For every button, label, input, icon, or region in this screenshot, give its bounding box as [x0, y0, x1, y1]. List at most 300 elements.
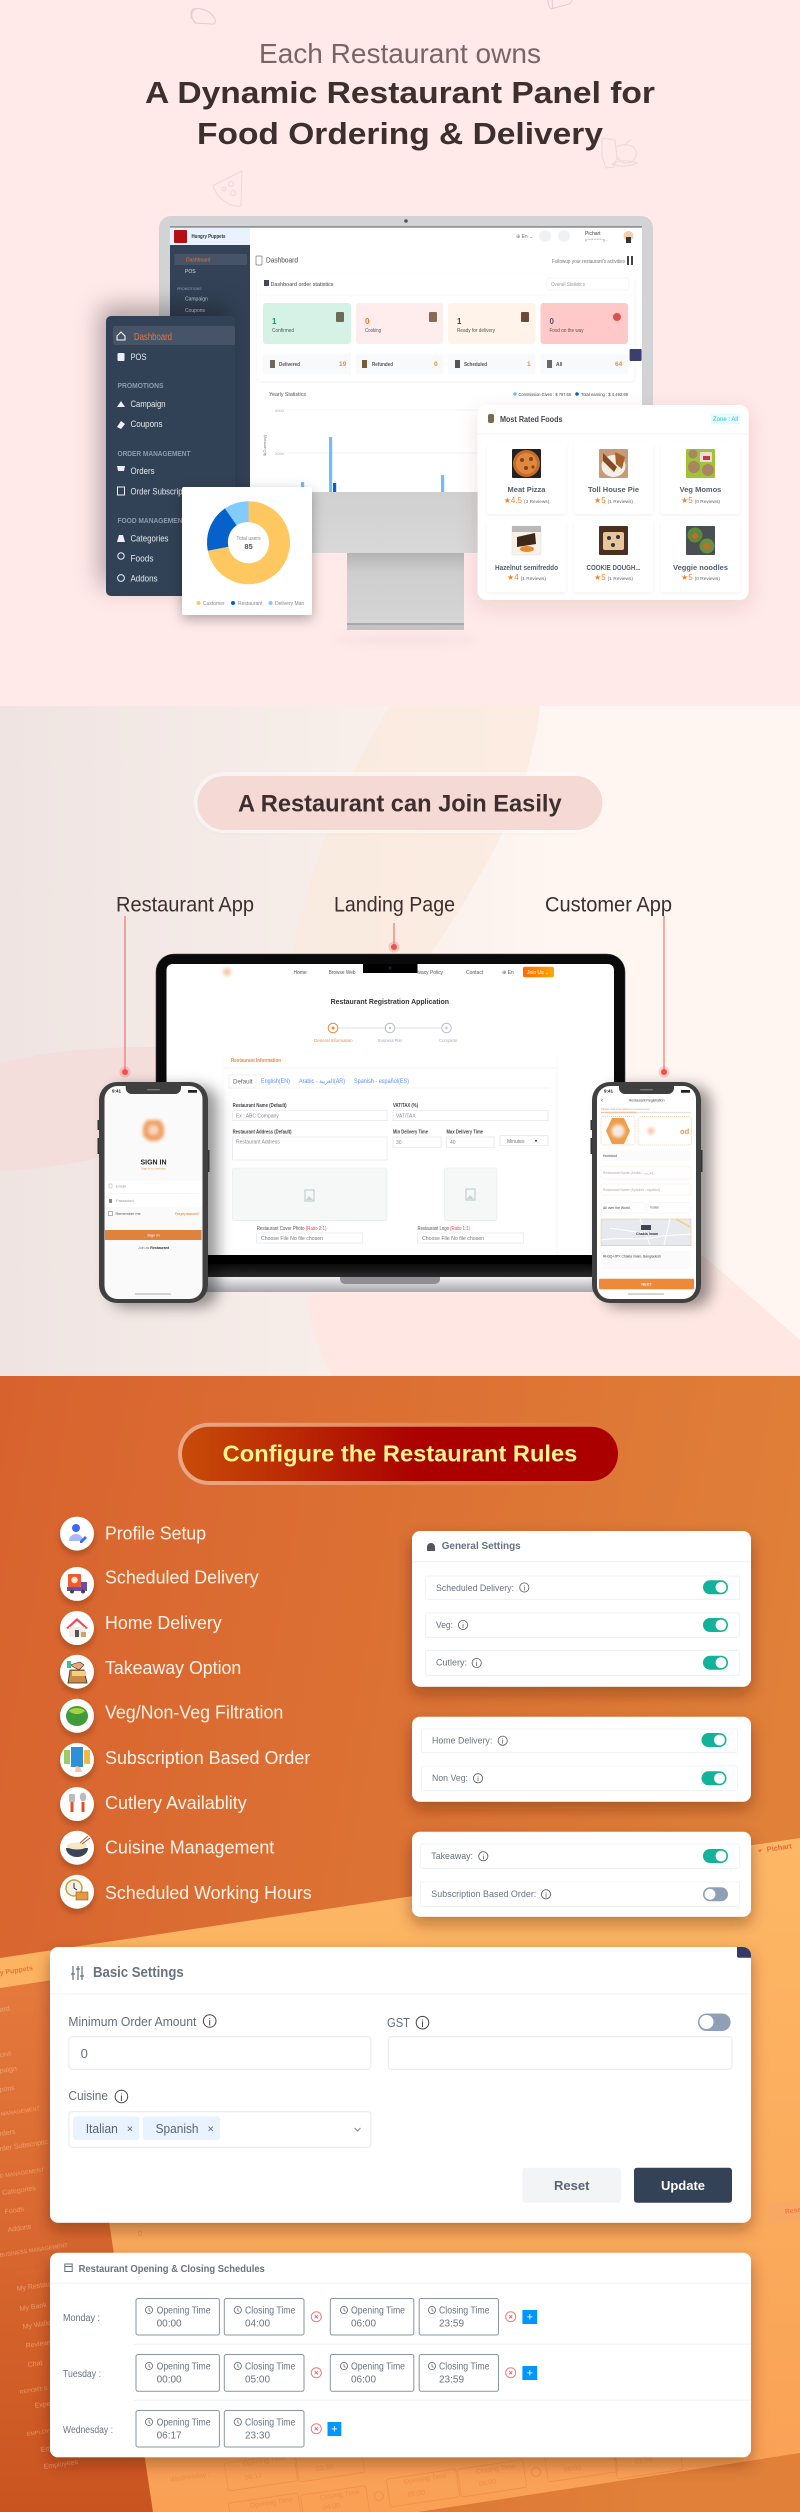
heading pill: join easily: A Restaurant can Join Easily [238, 790, 562, 818]
address box [601, 1251, 691, 1269]
field: cuisine: i [120, 2093, 123, 2104]
stepper: General Information [314, 1038, 353, 1043]
screen sidebar: PROMOTIONS [177, 287, 202, 291]
stat card: cooking: Cooking [365, 328, 381, 334]
screen top bar [516, 230, 634, 243]
general settings heading [412, 1540, 751, 1562]
field: gst [387, 2014, 732, 2069]
language tabs: Spanish - español(ES) [354, 1078, 409, 1085]
file upload inputs: Restaurant Cover Photo (Ratio 2:1) [257, 1226, 327, 1232]
home indicator [135, 1294, 171, 1295]
row: veg: Veg: [436, 1620, 453, 1631]
backdrop sidebar text: Addons [7, 2223, 32, 2234]
remember me row [108, 1212, 200, 1216]
order statistics panel: Overall Statistics [551, 282, 585, 288]
home indicator [628, 1294, 664, 1295]
feature: cutlery availability: Cutlery Availablity [105, 1793, 247, 1813]
backdrop zero field: 0 [138, 2231, 142, 2238]
backdrop sidebar text: MANAGEMENT [0, 2106, 41, 2118]
row: scheduled delivery: i [524, 1586, 526, 1592]
feature: scheduled working hours: Scheduled Working Hours [105, 1883, 312, 1903]
sidebar order group: Order Subscrip [130, 486, 182, 498]
screen top bar: ⊕ En ⌄ [516, 234, 533, 240]
small stat row: Refunded [372, 362, 393, 368]
food: Veggie noodles: ★5 (0 Reviews) [681, 573, 720, 582]
row: veg: i [462, 1623, 464, 1630]
registration header: ‹ [601, 1098, 603, 1104]
monday slots: 04:00 [245, 2318, 270, 2330]
stat card: food on the way: Food on the way [550, 328, 584, 334]
schedule heading [50, 2263, 751, 2283]
backdrop schedule text [169, 2455, 653, 2512]
backdrop sidebar text: Categories [2, 2185, 37, 2197]
stepper [314, 1023, 458, 1043]
monitor stand [347, 553, 464, 630]
monday slots: 06:00 [351, 2318, 376, 2330]
donut chart: 85 [244, 542, 253, 551]
feature: veg filtration [60, 1699, 283, 1733]
cover upload: od [680, 1127, 690, 1136]
laptop base [150, 1255, 640, 1292]
monday slots: Closing Time [439, 2306, 490, 2316]
row: veg [426, 1613, 740, 1637]
landing nav: Home [294, 970, 307, 976]
food: Meat Pizza: Meat Pizza [508, 485, 546, 494]
schedule heading: Restaurant Opening & Closing Schedules [79, 2263, 265, 2275]
row: takeaway: i [483, 1854, 485, 1861]
field: minimum order amount: 0 [81, 2046, 88, 2061]
backdrop sidebar text: Foods [4, 2206, 25, 2216]
row: takeaway [420, 1844, 740, 1868]
chip: Italian [73, 2116, 139, 2140]
row: cutlery [426, 1650, 740, 1675]
registration form panel [224, 1053, 556, 1255]
doodle: pizza slice [213, 171, 242, 206]
backdrop schedule rows [224, 2442, 683, 2512]
logo upload [601, 1117, 635, 1145]
panel: general settings [412, 1531, 751, 1687]
row: non veg: Non Veg: [432, 1773, 468, 1784]
chip: Spanish [143, 2116, 220, 2140]
sidebar promotions group: Campaign [130, 399, 166, 410]
stat card: cooking: 0 [365, 317, 370, 326]
yearly statistics chart: Total earning : $ 4,492.99 [581, 392, 629, 397]
backdrop schedule text: 08:00 [563, 2464, 582, 2474]
backdrop sidebar text: y Puppets [0, 1965, 33, 1977]
food: Meat Pizza: ★4.5 (3 Reviews) [504, 496, 550, 505]
stat card: food on the way [540, 303, 628, 344]
donut legend: Delivery Man [275, 601, 304, 607]
sign in button [105, 1230, 202, 1250]
panel: opening and closing schedules [50, 2253, 751, 2457]
tuesday slots [136, 2354, 537, 2391]
sidebar food group: Foods [130, 554, 154, 564]
phone notch [112, 1086, 197, 1094]
monday slots: 00:00 [157, 2318, 182, 2330]
backdrop reset button [767, 2199, 800, 2224]
row: takeaway: Takeaway: [431, 1851, 473, 1862]
monday slots: Opening Time [351, 2306, 405, 2316]
sidebar POS item: POS [130, 352, 146, 363]
backdrop sidebar text [0, 1965, 79, 2471]
small stat row: Delivered [279, 362, 300, 368]
food: Hazelnut semifreddo: ★4 (1 Reviews) [507, 573, 546, 582]
yearly statistics chart: 4000 [275, 408, 285, 413]
feature: takeaway option: Takeaway Option [105, 1658, 241, 1678]
registration header [601, 1098, 691, 1113]
backdrop sidebar text: EMPLOY [26, 2429, 50, 2438]
food: Veg Momos: Veg Momos [680, 485, 721, 494]
stat card: ready for delivery: 1 [457, 317, 462, 326]
language tabs: Default [233, 1078, 253, 1086]
tuesday slots: Opening Time [351, 2362, 405, 2372]
backdrop schedule text: 23:30 [315, 2463, 334, 2473]
section: join background [0, 706, 800, 1376]
sidebar active item [113, 326, 235, 345]
feature: home delivery [60, 1611, 222, 1645]
landing nav [223, 967, 554, 977]
screen title: Followup your restaurant's activities [552, 259, 625, 265]
small stat row: 64 [615, 361, 623, 368]
stepper: Business Plan [378, 1038, 403, 1043]
feature: profile setup [60, 1517, 206, 1551]
tuesday slots: 00:00 [157, 2374, 182, 2386]
registration form panel: Restaurant Information [231, 1058, 281, 1064]
row: home delivery [422, 1729, 738, 1753]
basic settings heading: Basic Settings [93, 1965, 184, 1981]
backdrop sidebar text: rder Subscriptic [0, 2139, 49, 2153]
wednesday slots: Closing Time [245, 2418, 296, 2428]
backdrop sidebar text: Reviews [25, 2339, 53, 2350]
food: COOKIE DOUGH [574, 520, 653, 592]
sidebar POS item [118, 352, 146, 363]
label: Landing Page: Landing Page [334, 894, 455, 916]
tuesday slots: Closing Time [439, 2362, 490, 2372]
field: minimum order amount: Minimum Order Amount [68, 2014, 197, 2029]
donut legend: Restaurant [238, 601, 263, 607]
callout line: customer app [658, 916, 670, 1078]
field: cuisine [68, 2088, 371, 2147]
backdrop schedule text: 06:00 [478, 2478, 497, 2488]
wednesday slots: + [331, 2424, 338, 2436]
food: COOKIE DOUGH: COOKIE DOUGH... [586, 563, 640, 572]
file upload inputs: Choose File No file chosen [261, 1236, 323, 1242]
backdrop schedule text: Opening Time [249, 2497, 294, 2510]
sidebar order group: ORDER MANAGEMENT [118, 451, 191, 458]
general settings heading: General Settings [442, 1540, 521, 1552]
language tabs: English(EN) [261, 1078, 290, 1085]
small stat row: 1 [527, 361, 531, 368]
sidebar promotions group: Coupons [130, 419, 163, 430]
yearly statistics chart: 2000 [275, 451, 285, 456]
monitor stand shadow [335, 634, 475, 646]
day labels: Tuesday : [63, 2369, 101, 2380]
stat card: food on the way: 0 [550, 317, 554, 326]
monitor body [159, 216, 653, 553]
backdrop schedule text: 04:00 [322, 2502, 341, 2512]
yearly statistics chart: Commission Given : $ 797.55 [518, 392, 572, 397]
row: home delivery: i [502, 1739, 504, 1746]
laptop mockup [150, 954, 640, 1292]
chip: Spanish: Spanish [156, 2121, 198, 2136]
stat card: ready for delivery: Ready for delivery [457, 328, 495, 334]
panel: order toggles [412, 1832, 751, 1917]
chip: Italian: Italian [86, 2121, 118, 2136]
language tabs: Arabic - العربية(AR) [299, 1078, 345, 1085]
registration header: Please add information to proceed next [601, 1107, 650, 1111]
backdrop sidebar text: REPORT S [19, 2386, 48, 2396]
backdrop sidebar text: My Walle [22, 2320, 52, 2331]
small stat row [263, 354, 628, 374]
food: Veggie noodles [661, 520, 740, 592]
backdrop sidebar text: Expe [34, 2401, 51, 2410]
row: non veg: i [477, 1776, 479, 1783]
foods card heading: Most Rated Foods [500, 415, 563, 424]
laptop lid [156, 954, 625, 1262]
heading pill: configure rules [178, 1423, 618, 1485]
phone notch [604, 1086, 690, 1094]
small stat row: 19 [339, 361, 347, 368]
button: update [634, 2168, 732, 2203]
webcam notch [363, 964, 418, 973]
sidebar promotions group [117, 383, 166, 430]
foods card heading: Zone : All [713, 417, 738, 423]
food: COOKIE DOUGH: ★5 (1 Reviews) [594, 573, 633, 582]
monday slots: Closing Time [245, 2306, 296, 2316]
screen sidebar [170, 245, 250, 492]
backdrop sidebar text: Restaurant [16, 2266, 51, 2278]
wednesday slots: Opening Time [157, 2418, 211, 2428]
form fields [233, 1103, 548, 1160]
food: Toll House Pie: Toll House Pie [588, 485, 639, 494]
form fields: Minutes [507, 1139, 525, 1145]
feature: veg filtration: Veg/Non-Veg Filtration [105, 1703, 283, 1723]
screen title [256, 256, 632, 265]
food: Veg Momos [661, 443, 740, 514]
yearly statistics chart: Yearly Statistics [269, 392, 306, 398]
tuesday slots: 06:00 [351, 2374, 376, 2386]
row: cutlery: Cutlery: [436, 1658, 467, 1668]
feature: scheduled delivery: Scheduled Delivery [105, 1568, 259, 1588]
screen header logo block: Hungry Puppets [192, 234, 226, 240]
monitor chin [159, 492, 653, 553]
sidebar food group: Categories [130, 534, 169, 544]
sidebar order group: Orders [130, 466, 155, 477]
feature: home delivery: Home Delivery [105, 1613, 222, 1633]
chip: Spanish: × [207, 2124, 214, 2136]
feature: scheduled working hours [60, 1875, 312, 1909]
sidebar card [106, 316, 235, 596]
landing nav: ⊕ En [502, 970, 514, 976]
backdrop schedule text: Wednesday : [169, 2471, 211, 2484]
registration fields: Restaurant Name (Spanish - español) [603, 1188, 660, 1192]
heading pill: configure rules: Configure the Restaurant Rules [223, 1440, 577, 1466]
landing nav: Join Us ⌄ [527, 970, 549, 976]
map [601, 1219, 691, 1246]
screen top bar: p**********g... [585, 237, 608, 242]
next button [599, 1279, 694, 1289]
feature list [60, 1517, 312, 1909]
foods card heading [478, 414, 749, 434]
title line one: A Dynamic Restaurant Panel for [145, 75, 655, 110]
doodle: taco right [548, 0, 572, 9]
tuesday slots: Closing Time [245, 2362, 296, 2372]
sign in heading: SIGN IN [140, 1160, 167, 1166]
form fields: 40 [450, 1140, 456, 1146]
form fields: Restaurant Name (Default) [233, 1103, 287, 1109]
corner tab [737, 1947, 751, 1958]
sign in fields [104, 1181, 202, 1207]
feature: cuisine management: Cuisine Management [105, 1838, 274, 1858]
food: Toll House Pie: ★5 (1 Reviews) [594, 496, 633, 505]
day labels: Monday : [63, 2313, 100, 2324]
feature: subscription order: Subscription Based Order [105, 1748, 310, 1768]
callout line: landing page [388, 923, 400, 952]
order statistics panel: Dashboard order statistics [270, 282, 334, 288]
food: Hazelnut semifreddo [487, 520, 566, 592]
app logo [143, 1120, 164, 1141]
feature: cutlery availability [60, 1787, 247, 1821]
small stat row: Scheduled [464, 362, 487, 368]
small stat row: All [556, 362, 563, 368]
backdrop schedule text: Opening Time [242, 2455, 287, 2468]
sidebar food group: FOOD MANAGEMEN [118, 518, 182, 525]
registration fields: Restaurant Name (Arabic - عربي) [603, 1171, 653, 1175]
day labels: Wednesday : [63, 2425, 113, 2436]
label: Restaurant App: Restaurant App [116, 894, 254, 916]
yearly statistics chart: $(Currency) [262, 434, 267, 456]
food: Toll House Pie [574, 443, 653, 514]
wednesday slots: 06:17 [157, 2430, 182, 2442]
floating settings tab [630, 349, 642, 361]
heading pill: join easily [194, 772, 603, 833]
backdrop sidebar text: Employees [43, 2459, 79, 2471]
yearly statistics chart [257, 383, 642, 492]
backdrop schedule text: 06:17 [244, 2472, 263, 2482]
stat card: confirmed: 1 [272, 317, 277, 326]
stat card: confirmed [263, 303, 351, 344]
backdrop sidebar text: BUSINESS MANAGEMENT [0, 2243, 69, 2259]
wednesday slots: 23:30 [245, 2430, 270, 2442]
sign in fields: Email [116, 1184, 126, 1188]
title line two: Food Ordering & Delivery [197, 116, 604, 151]
row: home delivery: Home Delivery: [432, 1736, 492, 1746]
backdrop schedule text: 23:59 [634, 2456, 653, 2466]
form fields: Restaurant Address [236, 1140, 280, 1146]
sign in heading: Sign in to continue [141, 1166, 166, 1170]
address box: RH3Q+JPX Chakla Imam, Bangladesh [603, 1254, 661, 1258]
backdrop schedule text: 05:00 [407, 2489, 426, 2499]
button: update: Update [661, 2178, 705, 2193]
remember me row: Remember me [116, 1212, 141, 1216]
section: hero background [0, 0, 800, 706]
row: subscription order [420, 1882, 740, 1906]
tuesday slots: Opening Time [157, 2362, 211, 2372]
sidebar order group [117, 451, 191, 498]
monday slots: 23:59 [439, 2318, 464, 2330]
form fields: VAT/TAX [396, 1114, 416, 1120]
food: Hazelnut semifreddo: Hazelnut semifreddo [495, 563, 558, 572]
registration header: Restaurant Registration [629, 1098, 665, 1102]
donut chart [207, 501, 290, 584]
screen sidebar: Coupons [185, 308, 206, 314]
backdrop schedule text: Closing Time [475, 2463, 516, 2476]
sidebar active item: Dashboard [134, 332, 172, 343]
registration fields: Hoolstool [603, 1154, 617, 1158]
backdrop sidebar text: My Restau [16, 2281, 50, 2293]
dashboard screen [170, 226, 642, 492]
row: subscription order: Subscription Based Order: [431, 1889, 536, 1900]
field: minimum order amount: i [209, 2018, 211, 2028]
landing nav: ivacy Policy [418, 970, 443, 976]
landing nav: Browse Web [329, 970, 356, 976]
file upload inputs [257, 1226, 524, 1243]
form fields: 30 [396, 1140, 402, 1146]
sidebar food group [117, 518, 182, 584]
donut legend: Customer [203, 601, 225, 607]
row: scheduled delivery [426, 1576, 740, 1599]
screen top bar: Pichart [585, 231, 601, 237]
food: Veg Momos: ★5 (0 Reviews) [681, 496, 720, 505]
language tabs [229, 1075, 550, 1088]
sign in button: Join as Restaurant [138, 1246, 170, 1250]
backdrop schedule text: Opening Time [403, 2473, 448, 2486]
form fields: VAT/TAX (%) [393, 1103, 418, 1109]
panel: basic settings [50, 1947, 751, 2223]
stat card: ready for delivery [448, 303, 536, 344]
monday slots: + [527, 2312, 533, 2324]
panel: delivery toggles [412, 1717, 751, 1802]
feature: cuisine management [60, 1831, 274, 1865]
field: minimum order amount [68, 2014, 371, 2069]
form fields: Restaurant Address (Default) [233, 1130, 292, 1136]
row: subscription order: i [545, 1892, 547, 1899]
basic settings heading [50, 1965, 751, 1994]
title: hero heading [145, 38, 655, 151]
row: non veg [422, 1766, 738, 1791]
section: rules background [0, 1376, 800, 2512]
monday slots [136, 2298, 537, 2335]
donut legend [196, 601, 304, 607]
phone notch: 9:41 [112, 1088, 122, 1094]
most rated foods card [478, 405, 749, 600]
row: scheduled delivery: Scheduled Delivery: [436, 1583, 514, 1594]
backdrop profile label: Pichart [766, 1841, 793, 1854]
form fields: Ex : ABC Company [236, 1114, 279, 1120]
feature: subscription order [60, 1743, 310, 1777]
phone: restaurant app sign in [98, 1082, 210, 1303]
stat card: confirmed: Confirmed [272, 328, 294, 334]
feature: takeaway option [60, 1655, 241, 1689]
phone notch: 9:41 [604, 1088, 614, 1094]
day labels [63, 2313, 113, 2436]
sign in heading [140, 1160, 167, 1170]
sign in button: Sign In [147, 1232, 160, 1238]
sidebar food group: Addons [130, 574, 158, 584]
order statistics panel [257, 275, 634, 381]
remember me row: Forget password? [175, 1212, 200, 1216]
wednesday slots [136, 2410, 341, 2447]
registration fields: All over the World [603, 1206, 630, 1210]
registration fields: Indian [650, 1206, 659, 1210]
label: Customer App: Customer App [545, 894, 672, 916]
small stat row: 0 [434, 361, 438, 368]
donut chart card [182, 487, 312, 615]
landing nav: Contact [466, 970, 484, 976]
chip: Italian: × [127, 2124, 133, 2136]
feature: scheduled delivery [60, 1567, 259, 1601]
button: reset: Reset [554, 2178, 590, 2193]
